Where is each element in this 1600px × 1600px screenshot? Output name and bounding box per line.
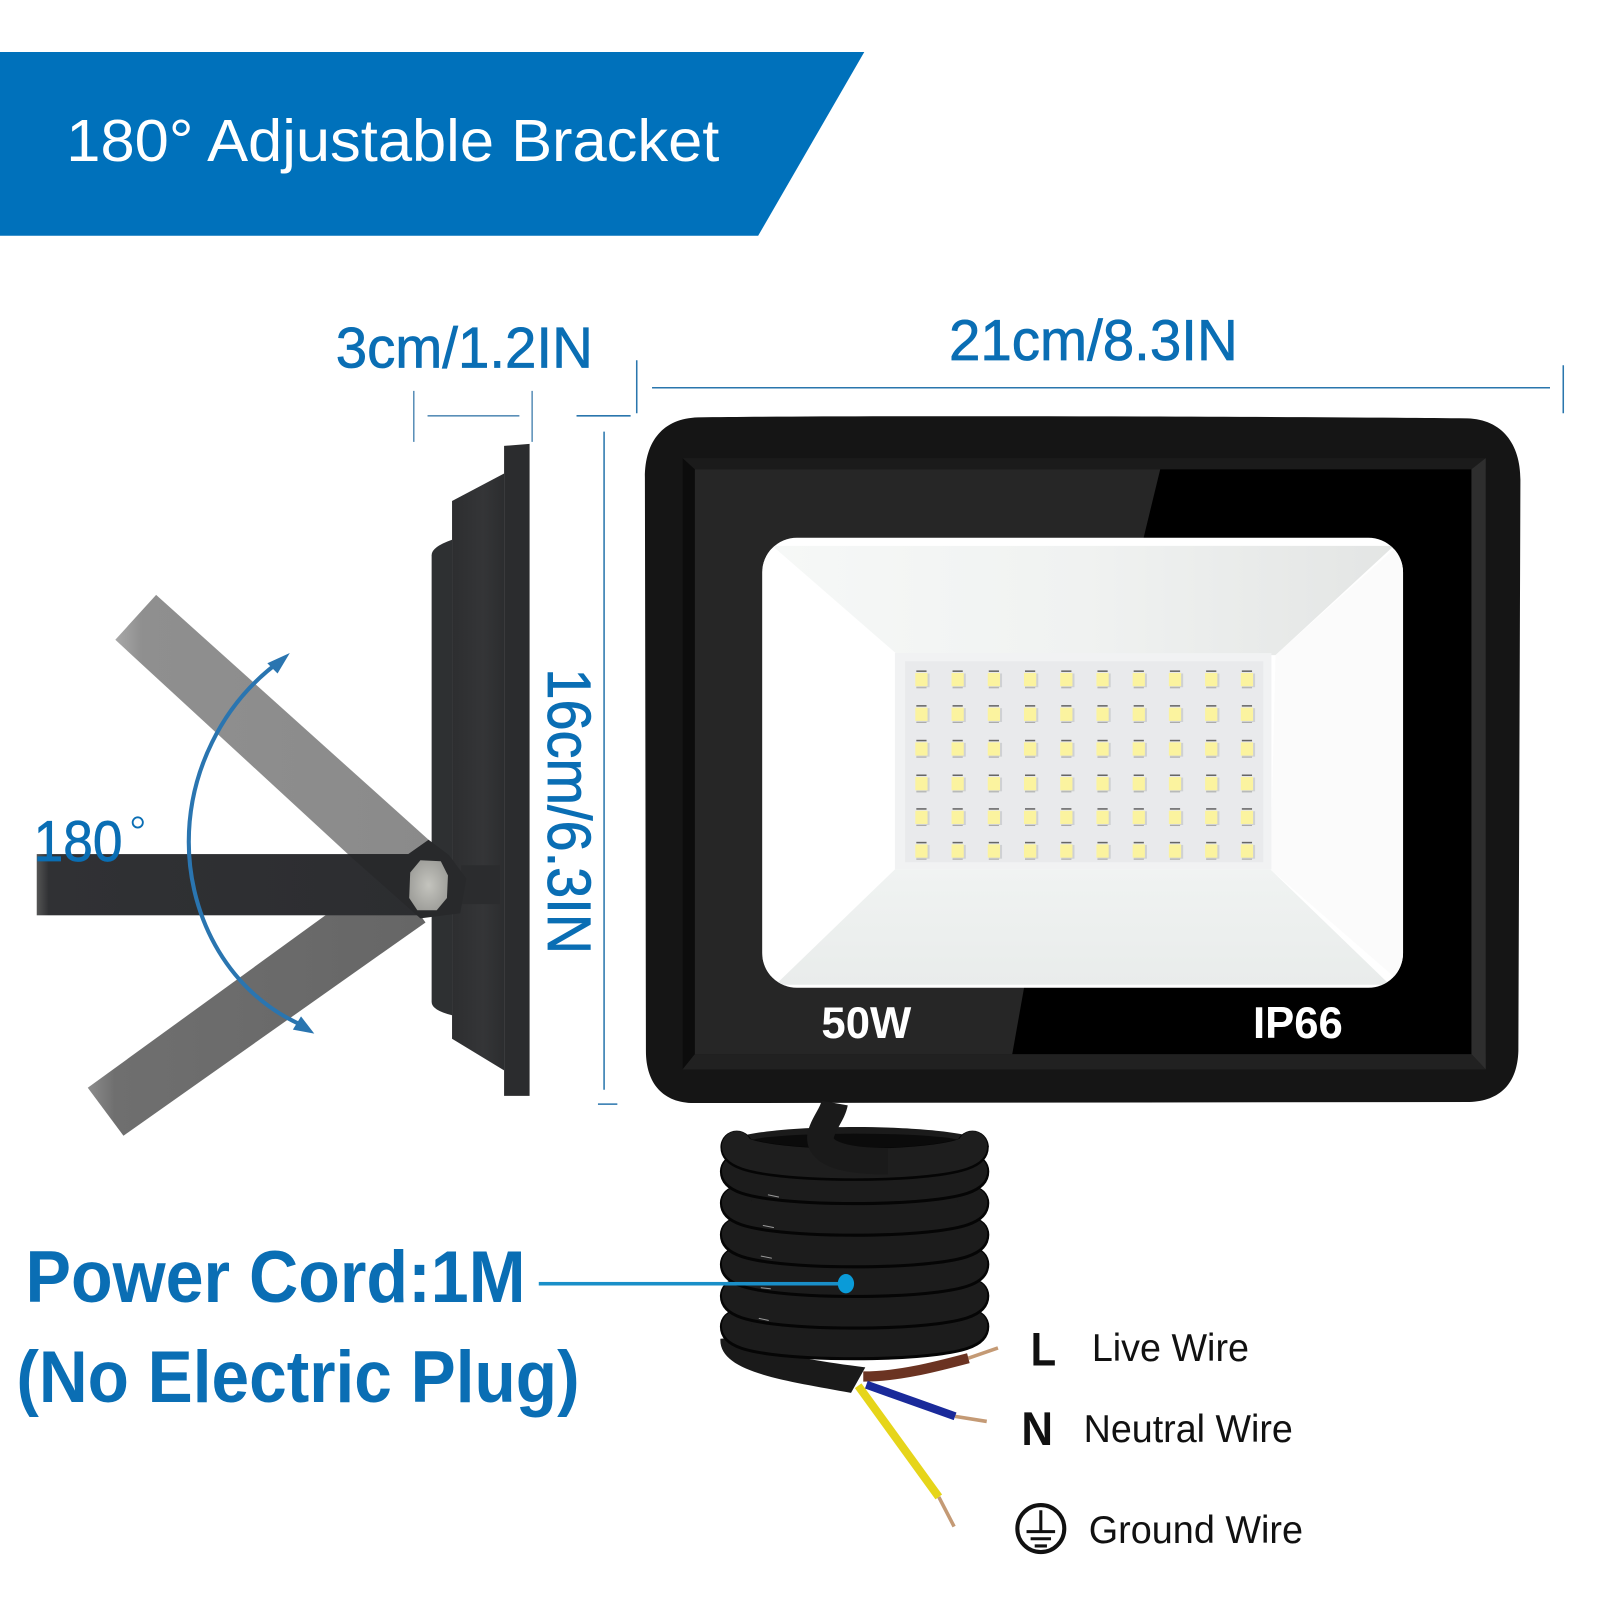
- rotation arc arrow: [189, 653, 314, 1034]
- title banner: [0, 52, 864, 236]
- back plate: [504, 444, 530, 1096]
- horizontal bracket: [37, 854, 435, 915]
- lens: [762, 538, 1403, 988]
- cord end piece: [720, 1337, 865, 1393]
- lower bracket position: [88, 898, 426, 1136]
- live wire label: Live Wire: [1092, 1327, 1249, 1370]
- neutral wire label: [1021, 1403, 1293, 1455]
- dimension: height: [535, 432, 617, 1104]
- live wire label: L: [1031, 1323, 1056, 1375]
- wires: [858, 1348, 998, 1527]
- dimension: width: [577, 309, 1563, 416]
- copper tips: [939, 1348, 998, 1527]
- angle label: 180: [34, 810, 122, 874]
- pivot plate: [348, 840, 466, 918]
- title text: 180° Adjustable Bracket: [66, 107, 719, 174]
- side view of floodlight with bracket: [37, 444, 530, 1136]
- ground wire label: [1017, 1505, 1303, 1552]
- bracket stub: [461, 865, 500, 904]
- power cord label: Power Cord:1M: [26, 1235, 526, 1318]
- wattage label: 50W: [821, 997, 912, 1048]
- bezel: [683, 458, 1486, 1069]
- ground wire label: Ground Wire: [1089, 1509, 1303, 1552]
- blue neutral wire: [866, 1385, 955, 1416]
- IP rating label: IP66: [1253, 997, 1343, 1048]
- dimension: depth: 3cm/1.2IN: [336, 316, 593, 380]
- neutral wire label: N: [1021, 1403, 1053, 1455]
- power cord label: (No Electric Plug): [16, 1335, 580, 1418]
- power cord label: [16, 1235, 580, 1418]
- dimension: width: 21cm/8.3IN: [949, 309, 1238, 373]
- front view of floodlight: [645, 416, 1520, 1103]
- cord leader line and dot: [539, 1274, 854, 1293]
- LED board: [895, 653, 1271, 869]
- yellow ground wire: [858, 1386, 939, 1497]
- inner housing: [432, 540, 452, 1015]
- glass: [695, 469, 1471, 1054]
- live wire label: [1031, 1323, 1249, 1375]
- neutral wire label: Neutral Wire: [1084, 1408, 1293, 1451]
- dimension: depth: [336, 316, 593, 442]
- housing: [645, 416, 1520, 1103]
- upper bracket position: [115, 595, 449, 918]
- glass reflection: [1012, 469, 1471, 1054]
- top loop: [721, 1127, 989, 1147]
- dimension: height: 16cm/6.3IN: [535, 668, 603, 954]
- cord neck: [820, 1103, 888, 1161]
- middle housing: [452, 473, 504, 1070]
- bolt: [409, 860, 448, 910]
- light gaps between coils: [759, 1195, 779, 1320]
- coiled power cord: [720, 1103, 989, 1393]
- brown live wire: [863, 1358, 968, 1377]
